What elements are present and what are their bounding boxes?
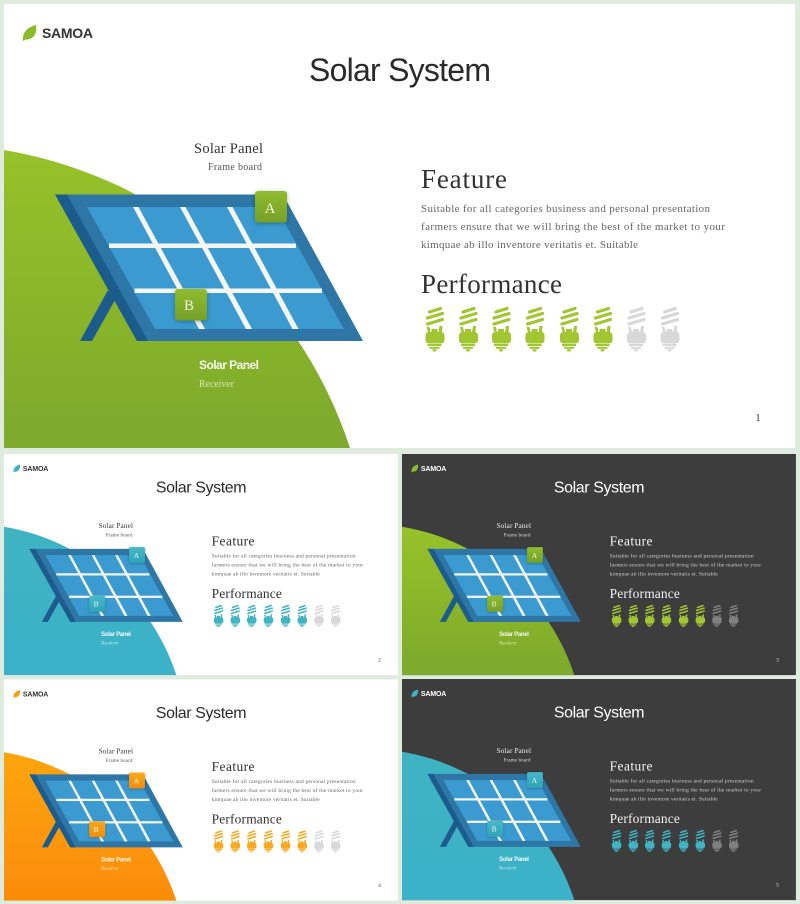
feature text: Suitable for all categories business and personal presentation [610,778,754,785]
performance heading: Performance [212,811,282,826]
green curved background [402,527,574,675]
label: frame board: Solar Panel [497,747,531,755]
label: frame board [99,522,133,539]
title: Solar System [156,705,247,722]
feature text [421,203,725,251]
feature text: farmers ensure that we will bring the best of the market to your [212,787,363,794]
orange curved background [4,752,176,901]
label: frame board: Frame board [106,759,133,764]
feature heading: Feature [610,534,653,549]
badge B: B [184,298,194,314]
slide 5: teal dark [402,679,796,900]
badge A: A [532,551,538,560]
feature text: farmers ensure that we will bring the best of the market to your [610,562,761,569]
feature text: kimquae ab illo inventore veritatis et. Suitable [610,572,718,578]
label: receiver [101,632,131,647]
page number: 3 [776,658,779,664]
feature text: kimquae ab illo inventore veritatis et. Suitable [610,797,718,803]
feature text [610,778,761,803]
green curved background [4,150,350,448]
solar panel illustration [55,191,363,341]
logo: SAMOA [421,691,446,698]
label: receiver: Receiver [101,867,119,872]
page number: 5 [776,883,779,889]
label: receiver: Solar Panel [499,632,529,638]
feature text: Suitable for all categories business and personal presentation [610,553,754,560]
logo: SAMOA [23,466,48,473]
slide 1: large green light [4,4,795,448]
feature text: farmers ensure that we will bring the best of the market to your [212,562,363,569]
feature text: kimquae ab illo inventore veritatis et. Suitable [421,239,638,251]
performance bulbs [214,606,340,627]
teal curved background [4,527,176,675]
label: receiver: Receiver [499,642,517,647]
performance bulbs [426,308,680,352]
label: receiver [499,632,529,647]
label: receiver: Receiver [499,867,517,872]
solar panel illustration [427,547,581,622]
teal curved background [402,752,574,900]
label: receiver [199,358,259,390]
performance bulbs [612,831,738,852]
badge A: A [134,777,140,786]
badge B: B [492,599,497,608]
logo [13,464,48,473]
logo [13,690,48,698]
feature text: kimquae ab illo inventore veritatis et. Suitable [212,572,320,578]
label: frame board [99,748,133,764]
label: receiver: Solar Panel [199,358,259,372]
badge A [527,772,543,788]
badge A [255,191,287,222]
title: Solar System [554,704,645,721]
feature heading: Feature [610,759,653,774]
feature heading: Feature [421,164,507,194]
slide 3: green dark [402,454,796,675]
badge B: B [94,825,99,834]
title: Solar System [156,479,247,496]
page number: 4 [378,883,381,889]
badge B [487,821,503,837]
label: receiver: Receiver [101,642,119,647]
solar panel illustration [29,547,183,622]
logo: SAMOA [42,25,93,41]
performance heading: Performance [212,586,282,601]
feature text: kimquae ab illo inventore veritatis et. Suitable [212,797,320,803]
label: receiver: Solar Panel [101,857,131,863]
badge B: B [492,824,497,833]
label: frame board [497,522,531,539]
label: receiver: Receiver [199,379,235,390]
feature text [212,553,363,578]
feature text: farmers ensure that we will bring the best of the market to your [610,787,761,794]
badge A: A [265,201,276,217]
feature text: farmers ensure that we will bring the best of the market to your [421,221,725,233]
feature heading: Feature [212,534,255,549]
feature text: Suitable for all categories business and personal presentation [212,553,356,560]
slide 2: teal light [4,454,398,675]
badge B [89,821,105,837]
solar panel illustration [427,772,581,847]
badge B [89,596,105,612]
label: frame board: Frame board [504,759,531,764]
feature heading: Feature [212,759,255,774]
label: frame board: Solar Panel [99,522,133,530]
badge B [487,596,503,612]
label: receiver [101,857,131,872]
performance heading: Performance [610,811,680,826]
badge A [129,547,145,563]
label: frame board: Frame board [106,534,133,539]
label: frame board: Solar Panel [497,522,531,530]
badge A [527,547,543,563]
slide 4: orange light [4,680,398,901]
performance heading: Performance [421,269,562,299]
feature text [212,778,363,803]
feature text: Suitable for all categories business and personal presentation [421,203,710,215]
title: Solar System [554,479,645,496]
logo: SAMOA [421,466,446,473]
badge A [129,773,145,788]
label: frame board: Solar Panel [99,748,133,756]
title: Solar System [309,52,491,88]
page number: 1 [755,412,761,424]
logo: SAMOA [23,691,48,698]
performance bulbs [612,606,738,627]
label: receiver: Solar Panel [499,857,529,863]
label: receiver: Solar Panel [101,632,131,638]
badge A: A [134,551,140,560]
label: frame board: Frame board [208,162,262,173]
performance heading: Performance [610,586,680,601]
label: frame board: Frame board [504,534,531,539]
solar panel illustration [29,773,183,847]
label: frame board [497,747,531,764]
feature text [610,553,761,578]
label: frame board: Solar Panel [194,141,263,157]
logo [411,689,446,698]
feature text: Suitable for all categories business and personal presentation [212,778,356,785]
badge B [175,289,207,320]
label: receiver [499,857,529,872]
logo [411,464,446,473]
performance bulbs [214,831,340,853]
badge A: A [532,776,538,785]
label: frame board [194,141,263,173]
badge B: B [94,599,99,608]
page number: 2 [378,658,381,664]
